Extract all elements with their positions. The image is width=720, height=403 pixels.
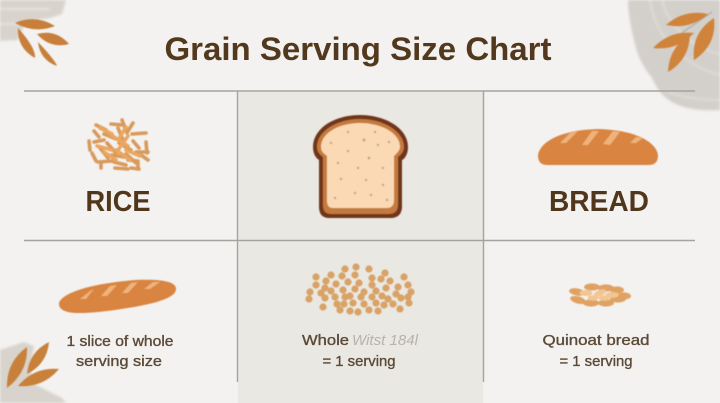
text: whole grain serving: Witst 184l bbox=[352, 333, 419, 349]
icon: rice bbox=[89, 120, 148, 169]
text: quinoa serving: Quinoat bread bbox=[542, 333, 650, 349]
icon: leaves bottom left bbox=[7, 342, 59, 388]
brush decoration: top right bbox=[628, 0, 720, 110]
icon: leaves top right bbox=[653, 12, 714, 72]
title: Grain Serving Size Chart bbox=[164, 31, 552, 67]
text: whole grain serving: = 1 serving bbox=[322, 354, 396, 370]
icon: whole grain seeds bbox=[305, 263, 415, 316]
icon: bread slice bbox=[313, 115, 408, 218]
text: rice serving: serving size bbox=[76, 354, 162, 370]
text: quinoa serving: = 1 serving bbox=[560, 354, 632, 370]
grid lines bbox=[24, 91, 695, 382]
text: rice serving: 1 slice of whole bbox=[66, 334, 174, 350]
icon: baguette bbox=[59, 280, 176, 313]
label: BREAD: BREAD bbox=[549, 186, 649, 218]
text: whole grain serving bbox=[302, 333, 419, 370]
panel: centre column bbox=[238, 92, 483, 403]
text: whole grain serving: Whole bbox=[302, 333, 349, 349]
icon: quinoa grains bbox=[568, 283, 631, 307]
brush decoration: bottom left bbox=[0, 342, 66, 403]
icon: leaves top left bbox=[15, 19, 69, 66]
text: rice serving bbox=[66, 334, 174, 370]
text: quinoa serving bbox=[542, 333, 650, 370]
brush decoration: top left bbox=[0, 0, 66, 41]
label: RICE: RICE bbox=[86, 186, 150, 218]
icon: bread loaf bbox=[538, 129, 658, 165]
